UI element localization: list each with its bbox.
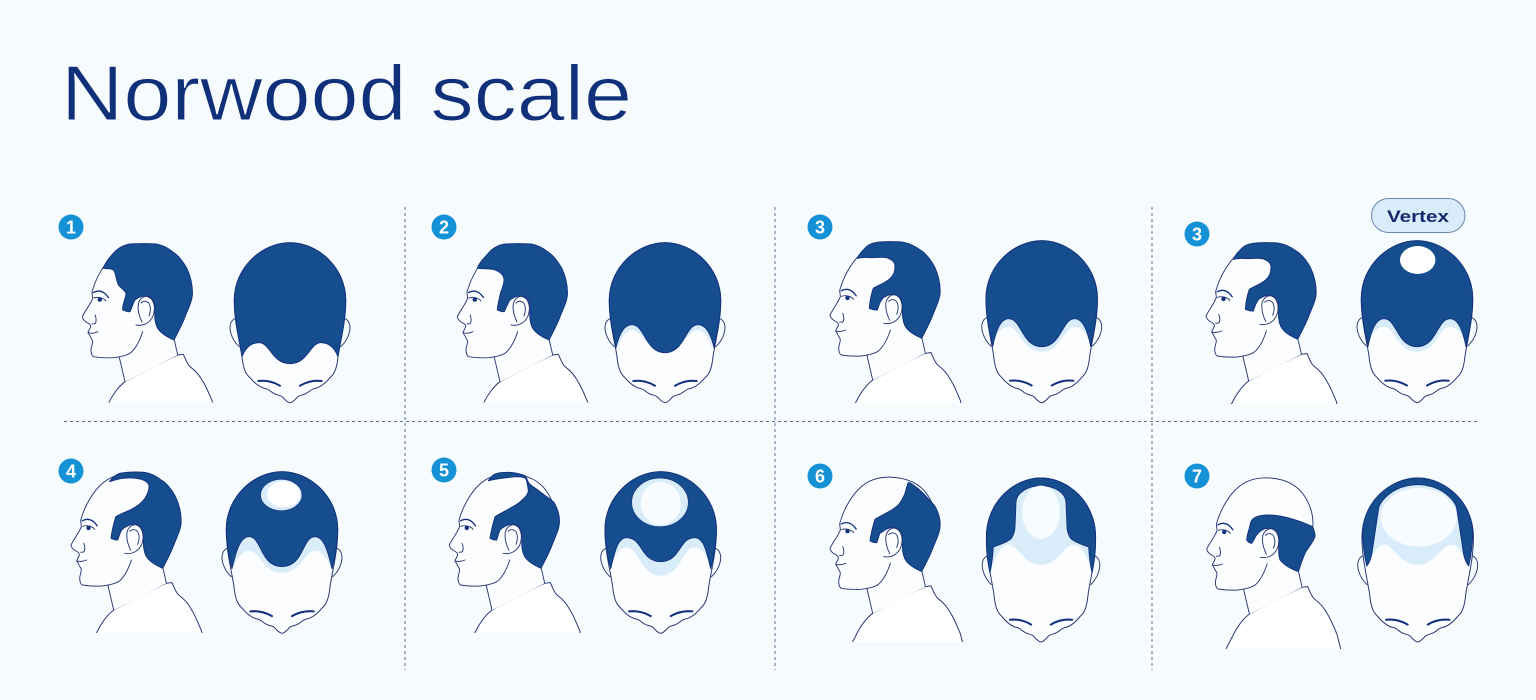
top view stage 2 (605, 243, 725, 403)
side view stage 3 (830, 242, 964, 415)
badge 7: 7 (1192, 466, 1202, 486)
badge 6 (808, 464, 832, 488)
badge 3: 3 (815, 218, 825, 238)
badge 2 (432, 214, 456, 240)
badge 4: 4 (66, 462, 76, 482)
top view stage 6 (982, 478, 1100, 642)
top view stage 1 (230, 243, 350, 403)
side view stage 4 (71, 472, 205, 645)
badge 4 (58, 458, 84, 484)
panel: stage 5 (432, 458, 721, 645)
side view stage 2 (457, 244, 591, 417)
badge 3 vertex: 3 (1192, 224, 1202, 244)
side view stage 6 (830, 477, 964, 648)
title: Norwood scale (61, 49, 632, 137)
badge 2: 2 (439, 218, 449, 238)
side view stage 3 vertex (1206, 243, 1340, 416)
top view stage 3 vertex (1357, 241, 1477, 403)
panel: stage 3 (808, 214, 1102, 415)
top view stage 3 (982, 241, 1102, 403)
top view stage 4 (222, 472, 342, 633)
badge 3 (808, 214, 832, 240)
panel: stage 3 vertex (1184, 198, 1477, 416)
badge 3 vertex (1184, 222, 1210, 246)
top view stage 7 (1358, 478, 1478, 642)
panel: stage 4 (58, 458, 342, 645)
badge 5 (432, 458, 456, 482)
vertex label: Vertex (1387, 207, 1450, 226)
panel: stage 2 (432, 214, 725, 417)
side view stage 5 (449, 472, 583, 645)
panel: stage 7 (1184, 464, 1478, 649)
panel: stage 6 (808, 464, 1100, 648)
panel: stage 1 (58, 214, 350, 417)
top view stage 5 (601, 472, 721, 633)
badge 1: 1 (66, 218, 76, 238)
side view stage 7 (1207, 478, 1341, 649)
vertex label (1372, 198, 1465, 232)
badge 5: 5 (439, 460, 449, 480)
badge 7 (1184, 464, 1210, 488)
side view stage 1 (82, 244, 216, 417)
badge 6: 6 (815, 466, 825, 486)
badge 1 (58, 214, 84, 240)
